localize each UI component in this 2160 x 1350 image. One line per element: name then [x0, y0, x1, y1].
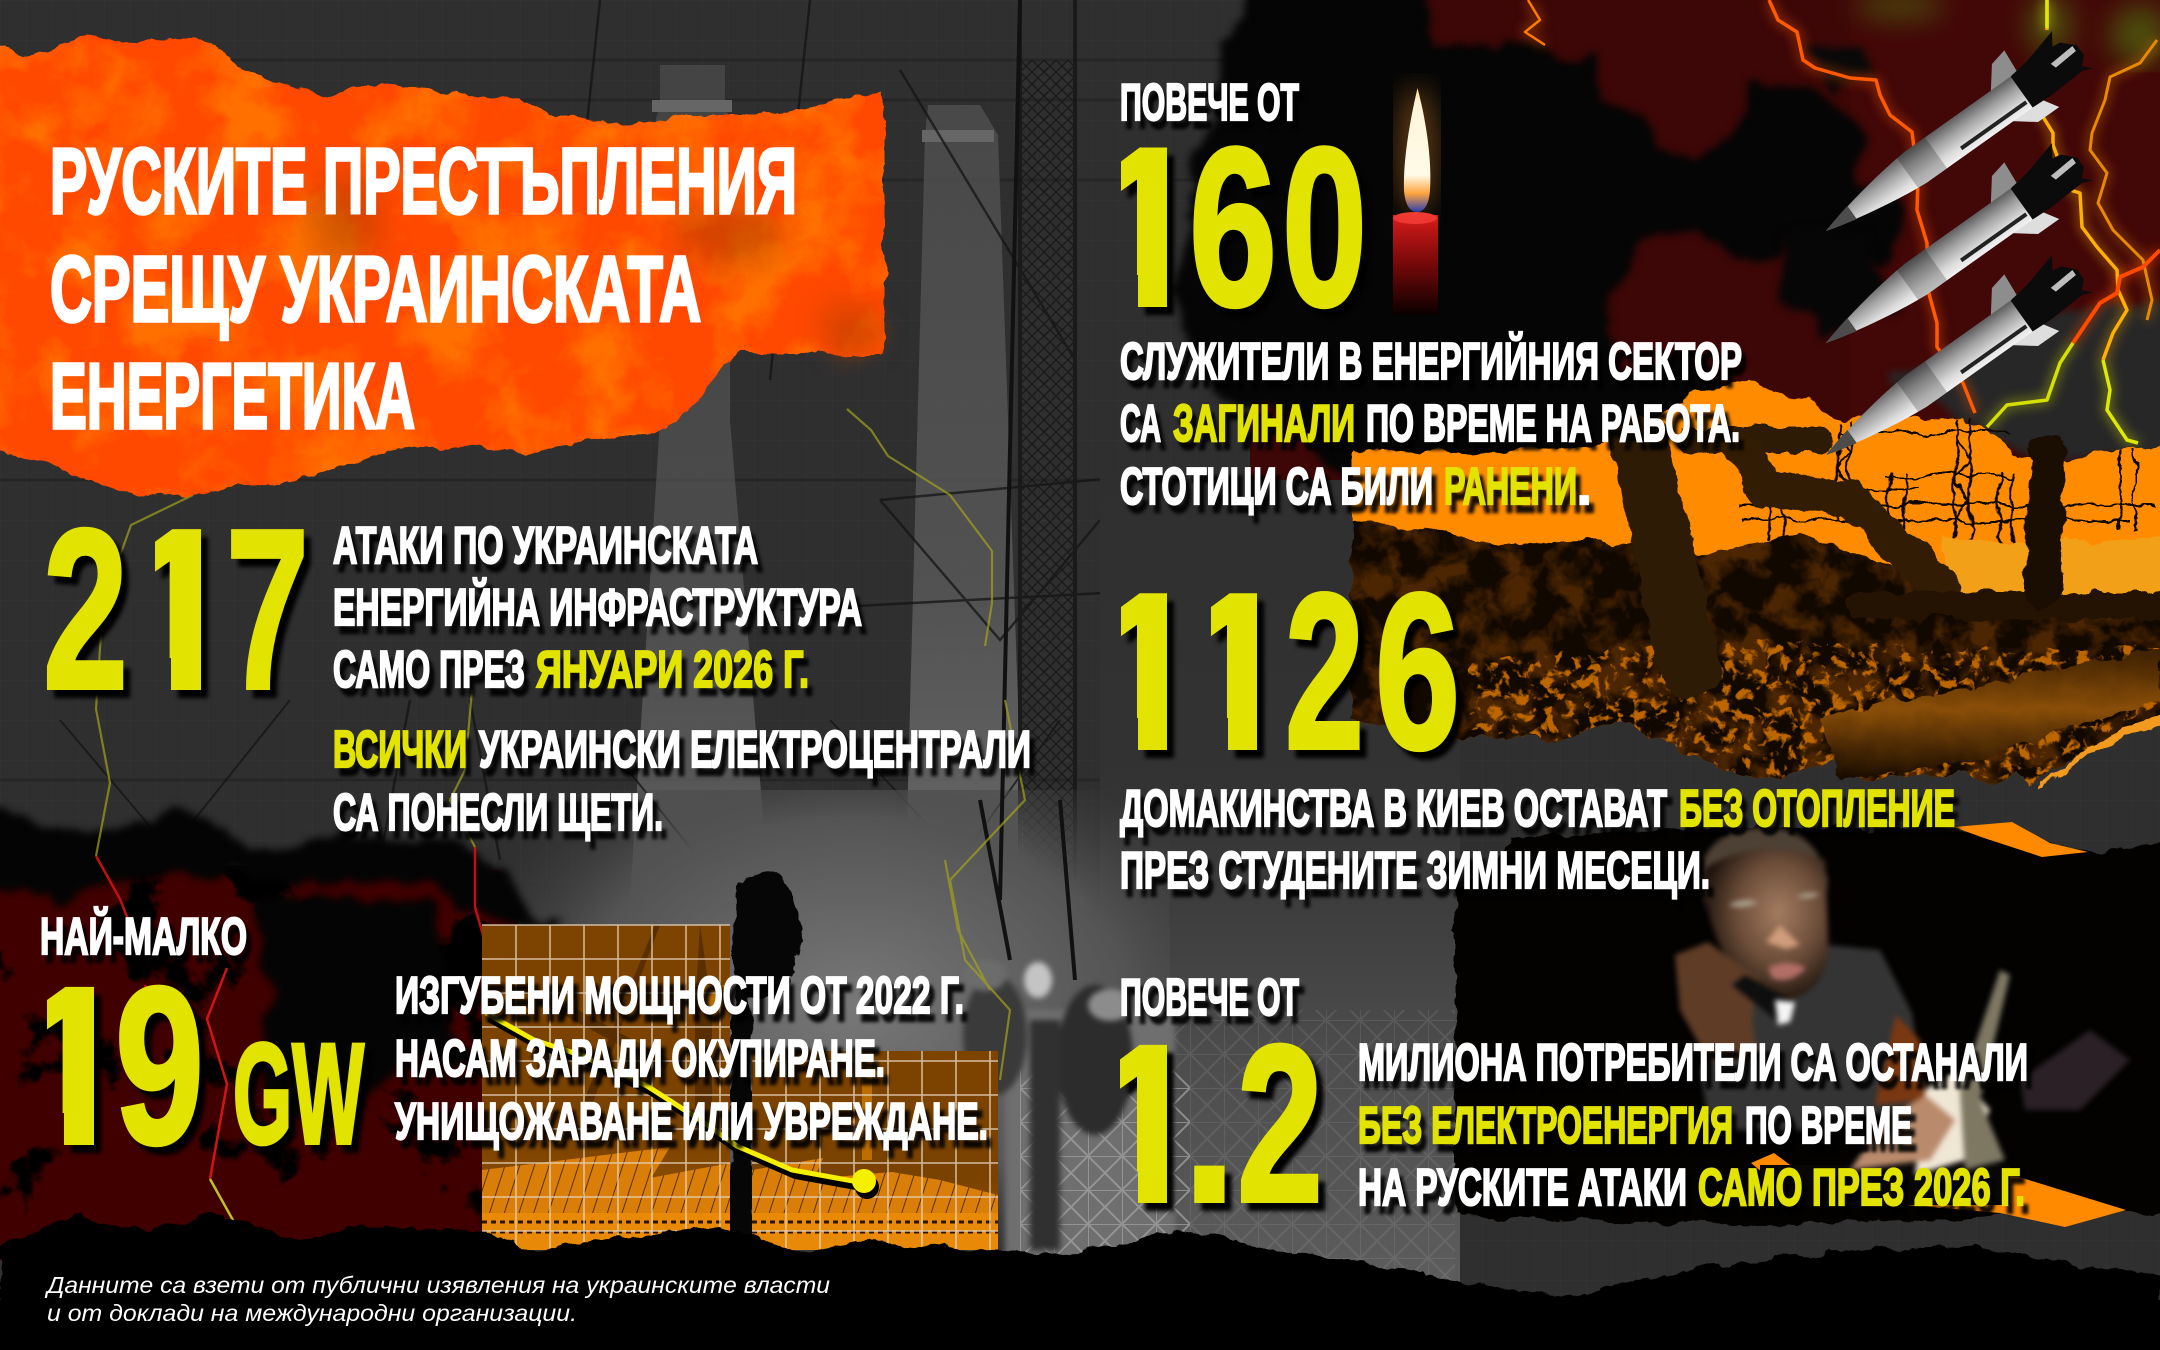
book and lit hand: [1850, 970, 2130, 1175]
ground strip: [482, 1213, 998, 1250]
text block: attacks description: ЯНУАРИ 2026 Г.: [536, 641, 809, 699]
hoodie: [1700, 945, 1925, 1130]
workers: [963, 959, 1133, 1250]
stat: 217 attacks number: [46, 526, 313, 701]
panel: destroyed substation, orange photo: [1352, 380, 2160, 790]
stat: 160 workers: [1121, 145, 1362, 317]
face: [1704, 849, 1828, 1000]
faint yellow lightning over the grey plant: [96, 409, 1025, 1080]
stat: 217 attacks number: 2: [43, 483, 128, 737]
text block: all power plants damaged: УКРАИНСКИ ЕЛЕКТРОЦЕНТРАЛИ: [479, 721, 1031, 779]
text block: energy workers killed: РАНЕНИ: [1444, 458, 1577, 516]
panel: red sky with black smoke, top right: [1180, 0, 2160, 480]
stat: 1126 households: 2: [1285, 548, 1364, 796]
text block: lost capacity: УНИЩОЖАВАНЕ ИЛИ УВРЕЖДАНЕ.: [395, 1093, 988, 1151]
text block: attacks description: [333, 517, 862, 699]
title: [50, 129, 797, 448]
stat: 1.2 million: 1: [1093, 999, 1202, 1249]
text block: attacks description: АТАКИ ПО УКРАИНСКАТА: [333, 517, 758, 575]
text block: lost capacity: [395, 967, 988, 1151]
text block: energy workers killed: СТОТИЦИ СА БИЛИ: [1120, 458, 1433, 516]
footnote: sources: и от доклади на международни организации.: [47, 1300, 577, 1326]
red lightning: [96, 847, 490, 1222]
green glow patches: [1855, 0, 2160, 65]
text block: consumers without electricity: НА РУСКИТЕ АТАКИ: [1358, 1159, 1687, 1217]
stat: 217 attacks number: 7: [226, 483, 309, 737]
chart: capacity loss over wind and solar photo: [482, 925, 998, 1250]
chart panel right: [752, 1051, 998, 1250]
label: at least: НАЙ-МАЛКО: [40, 907, 247, 966]
text block: energy workers killed: .: [1577, 458, 1591, 516]
text block: attacks description: ЕНЕРГИЙНА ИНФРАСТРУКТУРА: [333, 578, 862, 637]
stat: 160 workers: 1: [1093, 100, 1202, 353]
text block: households without heating: ПРЕЗ СТУДЕНИТЕ ЗИМНИ МЕСЕЦИ.: [1120, 842, 1710, 900]
label: more than, consumers: ПОВЕЧЕ ОТ: [1120, 969, 1299, 1027]
icon: three cruise missiles: [1801, 14, 2100, 483]
orange torn strip upper: [1954, 822, 2088, 857]
chart panel left: [482, 925, 730, 1250]
stat: 160 workers: 6: [1189, 100, 1277, 353]
title: РУСКИТЕ ПРЕСТЪПЛЕНИЯ: [50, 129, 797, 233]
panel: orange fire title banner: [0, 37, 884, 497]
footer: black torn strip: [0, 1213, 2160, 1350]
stat: 1126 households: 1: [1093, 548, 1202, 796]
pipes: [1640, 440, 2160, 670]
stat: 1.2 million: [1120, 1042, 1328, 1214]
icon: memorial candle: [1393, 86, 1438, 315]
stat: 19 GW: 1: [17, 941, 130, 1191]
text block: energy workers killed: ЗАГИНАЛИ: [1173, 395, 1355, 453]
text block: consumers without electricity: ПО ВРЕМЕ: [1745, 1097, 1912, 1155]
title: СРЕЩУ УКРАИНСКАТА: [50, 237, 701, 341]
flashlight: [1732, 975, 1795, 1025]
chart grid: [482, 925, 998, 1250]
text block: all power plants damaged: [333, 721, 1031, 842]
stat: 217 attacks number: 1: [124, 483, 237, 737]
stat: 19 GW: 9: [115, 941, 204, 1191]
label: more than, workers: ПОВЕЧЕ ОТ: [1120, 74, 1299, 132]
stat: 1.2 million: 2: [1237, 999, 1323, 1249]
text block: energy workers killed: СЛУЖИТЕЛИ В ЕНЕРГИЙНИЯ СЕКТОР: [1120, 332, 1742, 391]
text block: all power plants damaged: ВСИЧКИ: [333, 721, 467, 779]
hair: [1700, 828, 1828, 905]
footnote: sources: Данните са взети от публични изявления на украинските власти: [44, 1272, 830, 1298]
text block: consumers without electricity: БЕЗ ЕЛЕКТРОЕНЕРГИЯ: [1358, 1097, 1733, 1155]
sand pile: [1941, 535, 2160, 610]
text block: energy workers killed: СА: [1120, 395, 1161, 453]
text block: consumers without electricity: [1358, 1034, 2028, 1217]
text block: households without heating: [1120, 780, 1955, 900]
transmission pylons: [60, 0, 1200, 880]
lightning bolts, top right: [1525, 0, 2160, 443]
chimney left: [630, 65, 770, 900]
text block: energy workers killed: ПО ВРЕМЕ НА РАБОТА.: [1366, 395, 1740, 453]
panel: red and black smoke, lower left: [0, 800, 805, 1260]
chimney right: [905, 105, 1025, 900]
orange torn strip lower: [1751, 1153, 2126, 1227]
title: ЕНЕРГЕТИКА: [50, 344, 415, 448]
broken large pipe: [1821, 650, 2160, 780]
text block: lost capacity: ИЗГУБЕНИ МОЩНОСТИ ОТ 2022 Г.: [395, 967, 964, 1025]
photo: workers and pylons, lower middle: [470, 0, 1190, 1280]
stat: 1126 households: [1121, 591, 1464, 762]
footnote: sources: [44, 1272, 830, 1326]
text block: households without heating: ДОМАКИНСТВА В КИЕВ ОСТАВАТ: [1120, 780, 1667, 838]
text block: households without heating: БЕЗ ОТОПЛЕНИЕ: [1679, 780, 1955, 838]
text block: energy workers killed: [1120, 332, 1742, 516]
pylons silhouette: [1740, 420, 2160, 545]
text block: lost capacity: НАСАМ ЗАРАДИ ОКУПИРАНЕ.: [395, 1030, 885, 1088]
stat: 160 workers: 0: [1282, 100, 1367, 353]
rubble mass: [1352, 520, 2160, 787]
stat: 1126 households: 1: [1183, 548, 1292, 796]
stat: 19 GW: GW: [233, 1015, 364, 1174]
stat: 1126 households: 6: [1375, 548, 1460, 796]
stat: 1.2 million: .: [1183, 999, 1236, 1249]
text block: all power plants damaged: СА ПОНЕСЛИ ЩЕТИ.: [333, 784, 663, 842]
boy figure: [1675, 828, 2130, 1175]
text block: attacks description: САМО ПРЕЗ: [333, 641, 525, 699]
stat: 19 GW: [47, 984, 368, 1158]
panel: boy with flashlight: [1455, 822, 2160, 1227]
panel: grey column behind right statistics: [1100, 470, 1460, 1300]
chart trend line: [486, 1013, 879, 1199]
hand: [1675, 942, 1758, 1060]
